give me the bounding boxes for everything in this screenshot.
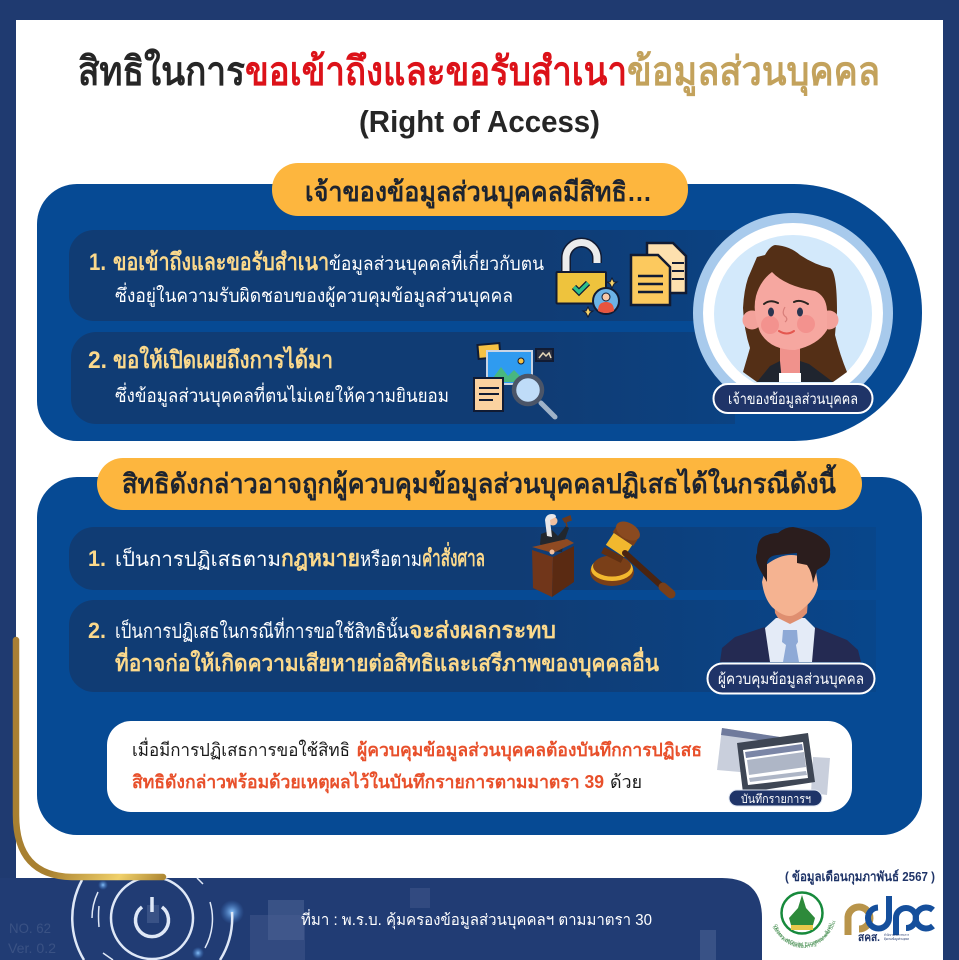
right 1: access and copy: 1. <box>89 249 106 276</box>
refusal ground 2: จะส่งผลกระทบ <box>409 617 556 643</box>
callout: recording refusal: เมื่อมีการปฏิเสธการขอใช้สิทธิ <box>132 737 350 760</box>
callout: recording refusal: ผู้ควบคุมข้อมูลส่วนบุคคลต้องบันทึกการปฏิเสธ <box>357 740 702 762</box>
refusal ground 1: หรือตาม <box>360 549 422 571</box>
icon: unlocked padlock with user <box>556 242 619 317</box>
icon: gavel <box>590 518 671 594</box>
callout: recording refusal <box>107 721 852 812</box>
heading tab: data subject rights: เจ้าของข้อมูลส่วนบุคคลมีสิทธิ… <box>305 177 652 209</box>
version note <box>8 920 56 956</box>
version note: Ver. 0.2 <box>8 940 56 956</box>
refusal ground 1: 1. <box>88 546 106 571</box>
refusal ground 1 <box>69 527 876 590</box>
refusal ground 2: เป็นการปฏิเสธในกรณีที่การขอใช้สิทธินั้น <box>115 617 409 643</box>
label: data subject: เจ้าของข้อมูลส่วนบุคคล <box>728 391 858 409</box>
avatar: data subject <box>693 213 893 413</box>
data date note: ( ข้อมูลเดือนกุมภาพันธ์ 2567 ) <box>785 869 935 885</box>
footer technology decoration <box>98 880 716 960</box>
icon: documents <box>631 243 686 305</box>
right 2: disclosure of acquisition: ขอให้เปิดเผยถึงการได้มา <box>113 345 333 374</box>
refusal ground 1: เป็นการปฏิเสธตาม <box>115 546 281 571</box>
label: data subject <box>714 384 872 413</box>
refusal ground 2 <box>69 600 876 692</box>
right 1: access and copy <box>69 230 735 321</box>
version note: NO. 62 <box>9 920 51 936</box>
title: สิทธิในการ <box>78 48 245 94</box>
panel: data subject rights <box>37 163 922 441</box>
footer band <box>0 877 762 960</box>
right 2: disclosure of acquisition <box>71 332 735 424</box>
avatar: data controller <box>708 527 874 694</box>
right 1: access and copy: ซึ่งอยู่ในความรับผิดชอบของผู้ควบคุมข้อมูลส่วนบุคคล <box>115 282 513 308</box>
heading tab: grounds for refusal <box>97 458 862 510</box>
right 2: disclosure of acquisition: ซึ่งข้อมูลส่วนบุคคลที่ตนไม่เคยให้ความยินยอม <box>115 382 449 408</box>
heading tab: data subject rights <box>272 163 688 216</box>
logo: pdpc <box>848 896 933 944</box>
panel: grounds for refusal <box>37 458 922 835</box>
title: (Right of Access) <box>359 104 600 139</box>
label: record: บันทึกรายการฯ <box>741 792 811 806</box>
logo: pdpc: สคส. <box>858 932 880 944</box>
icon: record document tablet <box>717 728 830 806</box>
label: data controller: ผู้ควบคุมข้อมูลส่วนบุคคล <box>718 671 864 689</box>
refusal ground 1: กฎหมาย <box>281 545 360 571</box>
callout: recording refusal: ด้วย <box>610 772 642 792</box>
icon: judge at podium <box>532 514 574 597</box>
right 2: disclosure of acquisition: 2. <box>88 347 107 374</box>
source note: ที่มา : พ.ร.บ. คุ้มครองข้อมูลส่วนบุคคลฯ ตามมาตรา 30 <box>301 909 652 930</box>
refusal ground 2: ที่อาจก่อให้เกิดความเสียหายต่อสิทธิและเสรีภาพของบุคคลอื่น <box>115 646 659 678</box>
logo: ministry emblem: Ministry of Digital Economy and Society <box>772 920 836 946</box>
callout: recording refusal: สิทธิดังกล่าวพร้อมด้วยเหตุผลไว้ในบันทึกรายการตามมาตรา 39 <box>132 771 604 794</box>
icon: image search <box>474 343 555 417</box>
logo: pdpc: สำนักงานคณะกรรมการ <box>884 933 909 937</box>
right 1: access and copy: ข้อมูลส่วนบุคคลที่เกี่ยวกับตน <box>329 250 544 276</box>
right 1: access and copy: ขอเข้าถึงและขอรับสำเนา <box>113 249 329 276</box>
icon: power symbol rings <box>72 877 232 960</box>
logo: pdpc: คุ้มครองข้อมูลส่วนบุคคล <box>884 937 909 942</box>
refusal ground 2: 2. <box>88 618 106 643</box>
title: ขอเข้าถึงและขอรับสำเนา <box>245 50 627 94</box>
title: ข้อมูลส่วนบุคคล <box>627 50 880 97</box>
heading tab: grounds for refusal: สิทธิดังกล่าวอาจถูกผู้ควบคุมข้อมูลส่วนบุคคลปฏิเสธได้ในกรณีดังนี้ <box>122 463 837 501</box>
title <box>78 48 880 139</box>
refusal ground 1: คำสั่งศาล <box>422 541 485 571</box>
label: data controller <box>708 664 874 694</box>
logo: ministry emblem: กระทรวงดิจิทัลเพื่อเศรษฐกิจและสังคม <box>774 923 832 948</box>
gold corner line <box>16 640 163 877</box>
